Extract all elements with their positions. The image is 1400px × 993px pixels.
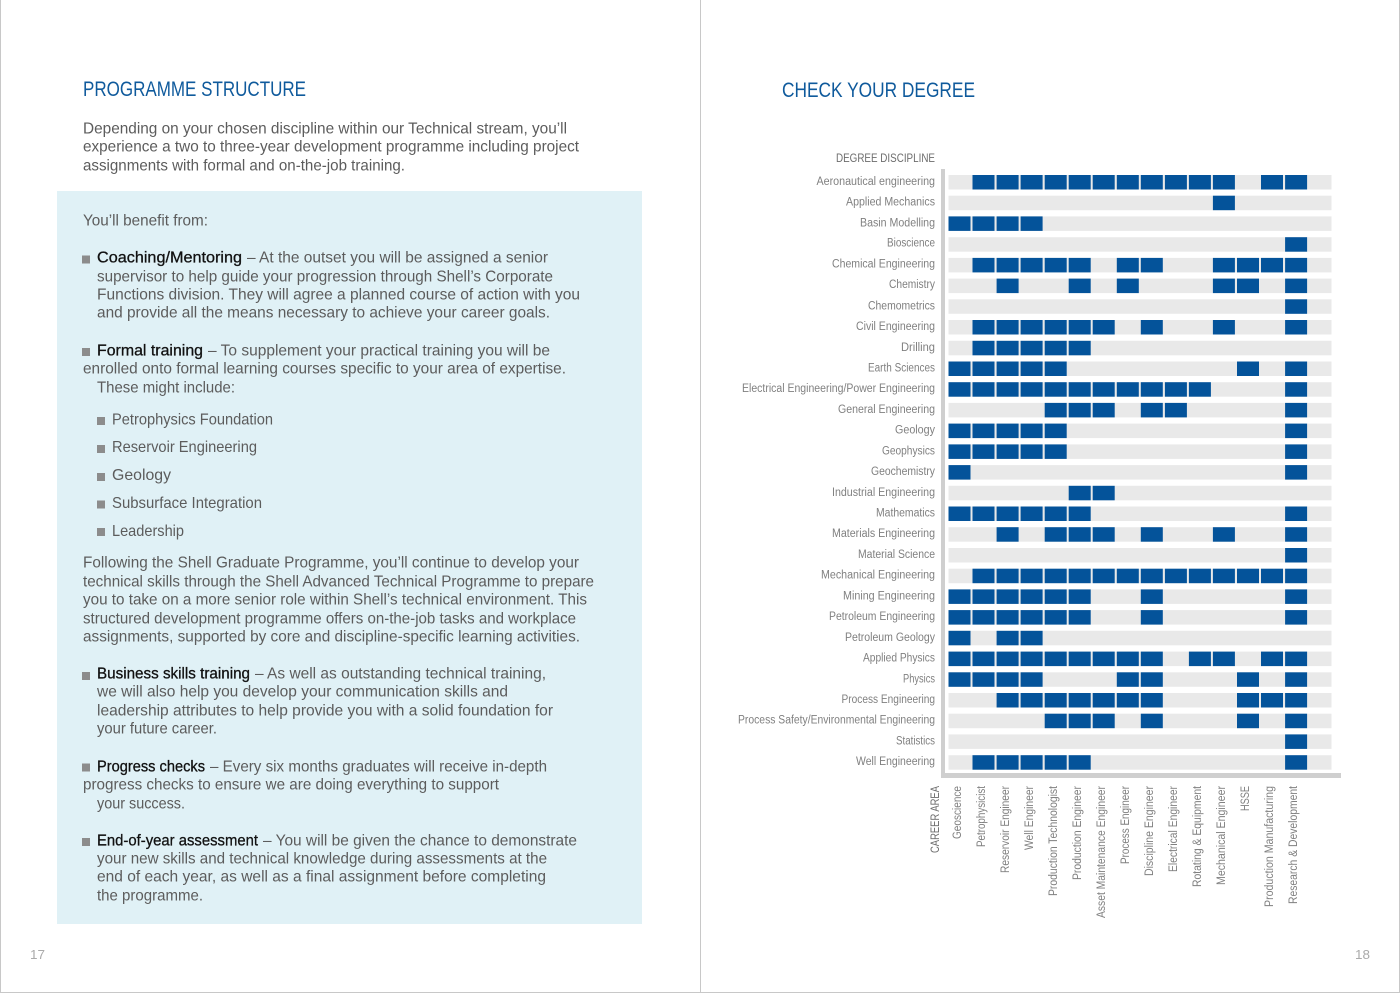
career area column labels xyxy=(930,785,1300,918)
row: Geochemistry: Geochemistry xyxy=(871,466,935,478)
row: Well Engineering: Well Engineering xyxy=(856,756,935,768)
row: Mathematics: Mathematics xyxy=(876,508,935,520)
benefit: coaching and mentoring: supervisor to help guide your progression through Shell’s Corporate xyxy=(97,268,553,286)
career area column labels: Petrophysicist xyxy=(976,785,988,847)
row: Statistics xyxy=(896,734,1332,749)
benefit: coaching and mentoring: – At the outset you will be assigned a senior xyxy=(247,250,549,266)
course list: Reservoir Engineering xyxy=(112,439,257,456)
row: Basin Modelling xyxy=(860,216,1332,231)
benefit: end-of-year assessment: – You will be given the chance to demonstrate xyxy=(263,832,577,850)
paragraph: advanced technical programme: you to take on a more senior role within Shell’s technical environment. This xyxy=(83,592,587,608)
row: Chemometrics xyxy=(868,299,1332,314)
row: Mathematics xyxy=(876,506,1332,521)
row: Geophysics: Geophysics xyxy=(882,445,935,457)
row: Civil Engineering xyxy=(856,320,1332,334)
benefit: formal training: Formal training xyxy=(97,342,203,360)
row: Material Science xyxy=(858,548,1332,562)
row: Drilling: Drilling xyxy=(901,342,935,354)
career area column labels: Production Engineer xyxy=(1072,786,1084,880)
benefit: business skills training: your future career. xyxy=(97,720,217,738)
row: Electrical Engineering/Power Engineering: Electrical Engineering/Power Engineering xyxy=(742,383,935,395)
benefit: end-of-year assessment: the programme. xyxy=(97,888,203,904)
row: Chemometrics: Chemometrics xyxy=(868,300,935,312)
course list: Petrophysics Foundation xyxy=(112,412,273,428)
heading: check your degree: CHECK YOUR DEGREE xyxy=(782,79,975,102)
row: Geochemistry xyxy=(871,465,1332,480)
intro paragraph: experience a two to three-year development programme including project xyxy=(83,138,580,156)
course list: Subsurface Integration xyxy=(112,495,262,512)
row: Bioscience: Bioscience xyxy=(887,238,935,250)
row: General Engineering xyxy=(838,403,1332,417)
intro paragraph: assignments with formal and on-the-job training. xyxy=(83,158,405,174)
row: Materials Engineering: Materials Engineering xyxy=(832,528,935,540)
row: Process Safety/Environmental Engineering xyxy=(738,714,1332,728)
row: Industrial Engineering: Industrial Engineering xyxy=(832,487,935,499)
right page: check your degree xyxy=(738,79,1370,962)
row: Mining Engineering: Mining Engineering xyxy=(843,590,935,602)
benefit: coaching and mentoring: Functions division. They will agree a planned course of action with you xyxy=(97,286,580,304)
row: Applied Mechanics: Applied Mechanics xyxy=(846,197,935,209)
row: Earth Sciences xyxy=(868,362,1332,376)
row: Petroleum Engineering: Petroleum Engineering xyxy=(829,611,935,623)
row: Civil Engineering: Civil Engineering xyxy=(856,321,935,333)
benefit: progress checks: – Every six months graduates will receive in-depth xyxy=(210,758,547,776)
course list: Leadership xyxy=(112,523,184,540)
row: Process Engineering xyxy=(842,693,1332,708)
row: Applied Physics xyxy=(863,652,1332,666)
row: Petroleum Engineering xyxy=(829,610,1332,625)
career area column labels: Process Engineer xyxy=(1120,786,1132,864)
axis title: degree discipline: DEGREE DISCIPLINE xyxy=(836,153,935,165)
benefit: business skills training xyxy=(82,666,554,738)
intro paragraph: Depending on your chosen discipline within our Technical stream, you’ll xyxy=(83,120,567,138)
paragraph: advanced technical programme: Following the Shell Graduate Programme, you’ll continue to develop your xyxy=(83,554,580,572)
row: Chemical Engineering xyxy=(832,258,1332,272)
paragraph: advanced technical programme: structured development programme offers on-the-job tasks and workplace xyxy=(83,610,576,628)
row: Drilling xyxy=(901,341,1332,355)
row: Physics: Physics xyxy=(903,673,935,685)
course list xyxy=(97,412,273,540)
row: Aeronautical engineering: Aeronautical engineering xyxy=(816,176,935,188)
intro paragraph xyxy=(83,120,580,174)
row: Mechanical Engineering: Mechanical Engineering xyxy=(821,570,935,582)
row: Petroleum Geology xyxy=(845,631,1332,645)
row: Mining Engineering xyxy=(843,589,1332,604)
career area column labels: Asset Maintenance Engineer xyxy=(1096,786,1108,918)
benefit: business skills training: leadership attributes to help provide you with a solid foundation for xyxy=(97,702,554,720)
row: Geology: Geology xyxy=(895,425,935,437)
chart axes xyxy=(941,169,1341,778)
benefit: progress checks xyxy=(82,758,547,812)
career area column labels: Production Manufacturing xyxy=(1264,786,1276,907)
row: Process Engineering: Process Engineering xyxy=(842,694,935,706)
benefit: formal training: – To supplement your practical training you will be xyxy=(208,342,550,360)
row: Process Safety/Environmental Engineering: Process Safety/Environmental Engineering xyxy=(738,715,935,727)
row: Statistics: Statistics xyxy=(896,735,935,747)
career area column labels: Production Technologist xyxy=(1048,785,1060,896)
page number 18: 18 xyxy=(1355,947,1370,962)
row: Material Science: Material Science xyxy=(858,549,935,561)
benefit: coaching and mentoring: and provide all the means necessary to achieve your career goals. xyxy=(97,304,550,322)
benefit: business skills training: – As well as outstanding technical training, xyxy=(255,666,546,682)
career area column labels: HSSE xyxy=(1240,786,1252,811)
page number 17: 17 xyxy=(30,947,45,962)
career area column labels: Reservoir Engineer xyxy=(1000,786,1012,873)
benefit: end-of-year assessment: End-of-year assessment xyxy=(97,832,259,850)
career area column labels: Electrical Engineer xyxy=(1168,786,1180,872)
row: Earth Sciences: Earth Sciences xyxy=(868,362,935,374)
paragraph: advanced technical programme: assignments, supported by core and discipline-specific learning activities. xyxy=(83,628,580,646)
matrix chart: degree discipline by career area xyxy=(738,153,1341,918)
row: Applied Physics: Applied Physics xyxy=(863,653,935,665)
career area column labels: Discipline Engineer xyxy=(1144,786,1156,876)
row: Aeronautical engineering xyxy=(816,175,1332,190)
benefit: coaching and mentoring: Coaching/Mentoring xyxy=(97,250,242,266)
career area column labels: Mechanical Engineer xyxy=(1216,786,1228,885)
row: Applied Mechanics xyxy=(846,196,1332,210)
career area column labels: Rotating & Equipment xyxy=(1192,785,1204,887)
row: Chemistry: Chemistry xyxy=(889,279,935,291)
paragraph: advanced technical programme xyxy=(83,554,594,646)
benefit: formal training xyxy=(82,342,566,396)
benefit: formal training: enrolled onto formal learning courses specific to your area of expertise. xyxy=(83,360,566,378)
benefit: end-of-year assessment xyxy=(82,832,577,904)
benefit: end-of-year assessment: end of each year, as well as a final assignment before completing xyxy=(97,868,546,886)
benefit: business skills training: we will also help you develop your communication skills and xyxy=(96,684,508,700)
benefit: end-of-year assessment: your new skills and technical knowledge during assessments at the xyxy=(97,850,547,868)
course list: Geology xyxy=(112,467,171,484)
row: General Engineering: General Engineering xyxy=(838,404,935,416)
benefit: coaching and mentoring xyxy=(82,250,580,322)
paragraph: advanced technical programme: technical skills through the Shell Advanced Technical Programme to prepare xyxy=(83,574,594,590)
row: Basin Modelling: Basin Modelling xyxy=(860,217,935,229)
benefit: progress checks: your success. xyxy=(97,796,185,812)
row: Physics xyxy=(903,672,1332,687)
benefits intro line: You’ll benefit from: xyxy=(83,212,208,230)
row: Electrical Engineering/Power Engineering xyxy=(742,382,1332,397)
row: Chemistry xyxy=(889,279,1332,293)
row: Chemical Engineering: Chemical Engineering xyxy=(832,258,935,270)
career area column labels: Geoscience xyxy=(952,786,964,839)
left page: programme structure xyxy=(30,78,642,962)
benefit: formal training: These might include: xyxy=(97,380,235,396)
row: Materials Engineering xyxy=(832,527,1332,542)
row: Mechanical Engineering xyxy=(821,569,1332,583)
row: Bioscience xyxy=(887,237,1332,252)
benefit: progress checks: progress checks to ensure we are doing everything to support xyxy=(83,776,500,794)
row: Well Engineering xyxy=(856,755,1332,770)
career area column labels: Well Engineer xyxy=(1024,786,1036,850)
heading: programme structure: PROGRAMME STRUCTURE xyxy=(83,78,306,101)
career area column labels: Research & Development xyxy=(1288,785,1300,904)
row: Industrial Engineering xyxy=(832,486,1332,500)
benefit: progress checks: Progress checks xyxy=(97,758,205,776)
row: Geology xyxy=(895,424,1332,438)
row: Geophysics xyxy=(882,444,1332,459)
career area column labels: CAREER AREA xyxy=(930,786,942,853)
row: Petroleum Geology: Petroleum Geology xyxy=(845,632,935,644)
benefit: business skills training: Business skills training xyxy=(97,666,250,682)
panel: benefits xyxy=(57,191,642,924)
